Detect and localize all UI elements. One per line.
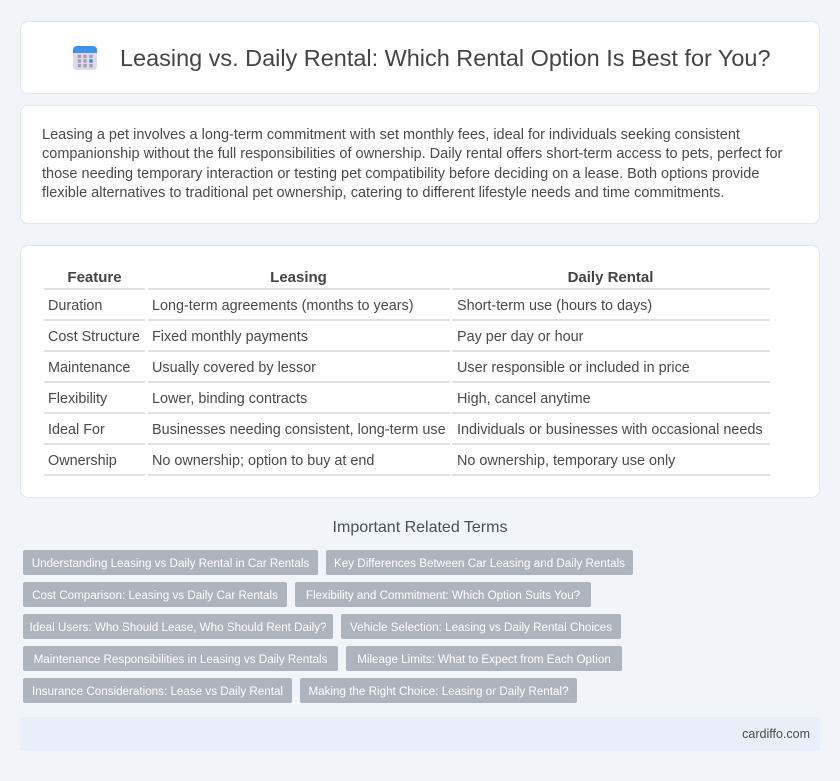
intro paragraph panel [20, 105, 820, 224]
title: Leasing vs. Daily Rental: Which Rental Option Is Best for You? [120, 45, 771, 71]
row: duration: Long-term agreements (months to years) [152, 298, 414, 314]
table header row: Feature [67, 269, 122, 286]
intro text: Leasing a pet involves a long-term commitment with set monthly fees, ideal for individuals seeking consistent [42, 127, 740, 143]
related terms tags: Insurance Considerations: Lease vs Daily Rental [32, 685, 283, 698]
intro text: those needing temporary interaction or testing pet compatibility before deciding on a lease. Both options provide [42, 166, 759, 182]
row: duration [44, 298, 770, 321]
row: flexibility [44, 391, 770, 414]
related terms tags: Vehicle Selection: Leasing vs Daily Rental Choices [350, 621, 612, 634]
row: cost structure: Cost Structure [48, 329, 140, 345]
related terms tags: Flexibility and Commitment: Which Option Suits You? [306, 589, 580, 602]
row: ideal for: Businesses needing consistent, long-term use [152, 422, 446, 438]
row: ownership [44, 453, 770, 476]
header panel [20, 21, 820, 94]
row: flexibility: Lower, binding contracts [152, 391, 307, 407]
table header row [44, 269, 770, 290]
row: maintenance: Usually covered by lessor [152, 360, 316, 376]
row: ideal for: Ideal For [48, 422, 105, 438]
icon: calendar [73, 46, 97, 70]
related terms tags: Understanding Leasing vs Daily Rental in Car Rentals [32, 557, 309, 570]
footer bar [20, 717, 820, 751]
related terms tags [23, 550, 633, 703]
row: duration: Duration [48, 298, 102, 314]
comparison table panel [20, 245, 820, 498]
table header row: Daily Rental [568, 269, 653, 286]
row: flexibility: High, cancel anytime [457, 391, 591, 407]
row: cost structure: Pay per day or hour [457, 329, 583, 345]
row: ownership: Ownership [48, 453, 117, 469]
related terms heading: Important Related Terms [333, 519, 507, 536]
row: cost structure [44, 329, 770, 352]
related terms tags: Key Differences Between Car Leasing and Daily Rentals [334, 557, 625, 570]
row: cost structure: Fixed monthly payments [152, 329, 308, 345]
related terms tags: Making the Right Choice: Leasing or Daily Rental? [308, 685, 569, 698]
intro text: companionship without the full responsibilities of ownership. Daily rental offers short-term access to pets, perfect for [42, 146, 782, 162]
row: maintenance: Maintenance [48, 360, 130, 376]
intro text: flexible alternatives to traditional pet ownership, catering to different lifestyle needs and time commitments. [42, 185, 724, 201]
row: duration: Short-term use (hours to days) [457, 298, 652, 314]
related terms tags: Ideal Users: Who Should Lease, Who Should Rent Daily? [30, 621, 326, 634]
footer site name: cardiffo.com [742, 727, 810, 741]
row: maintenance [44, 360, 770, 383]
table header row: Leasing [270, 269, 327, 286]
row: ownership: No ownership, temporary use only [457, 453, 675, 469]
related terms tags: Cost Comparison: Leasing vs Daily Car Rentals [32, 589, 278, 602]
row: ideal for: Individuals or businesses with occasional needs [457, 422, 763, 438]
row: flexibility: Flexibility [48, 391, 107, 407]
row: ownership: No ownership; option to buy at end [152, 453, 374, 469]
related terms tags: Maintenance Responsibilities in Leasing vs Daily Rentals [34, 653, 327, 666]
row: ideal for [44, 422, 770, 445]
row: maintenance: User responsible or included in price [457, 360, 690, 376]
intro text [42, 127, 782, 201]
related terms tags: Mileage Limits: What to Expect from Each Option [357, 653, 611, 666]
